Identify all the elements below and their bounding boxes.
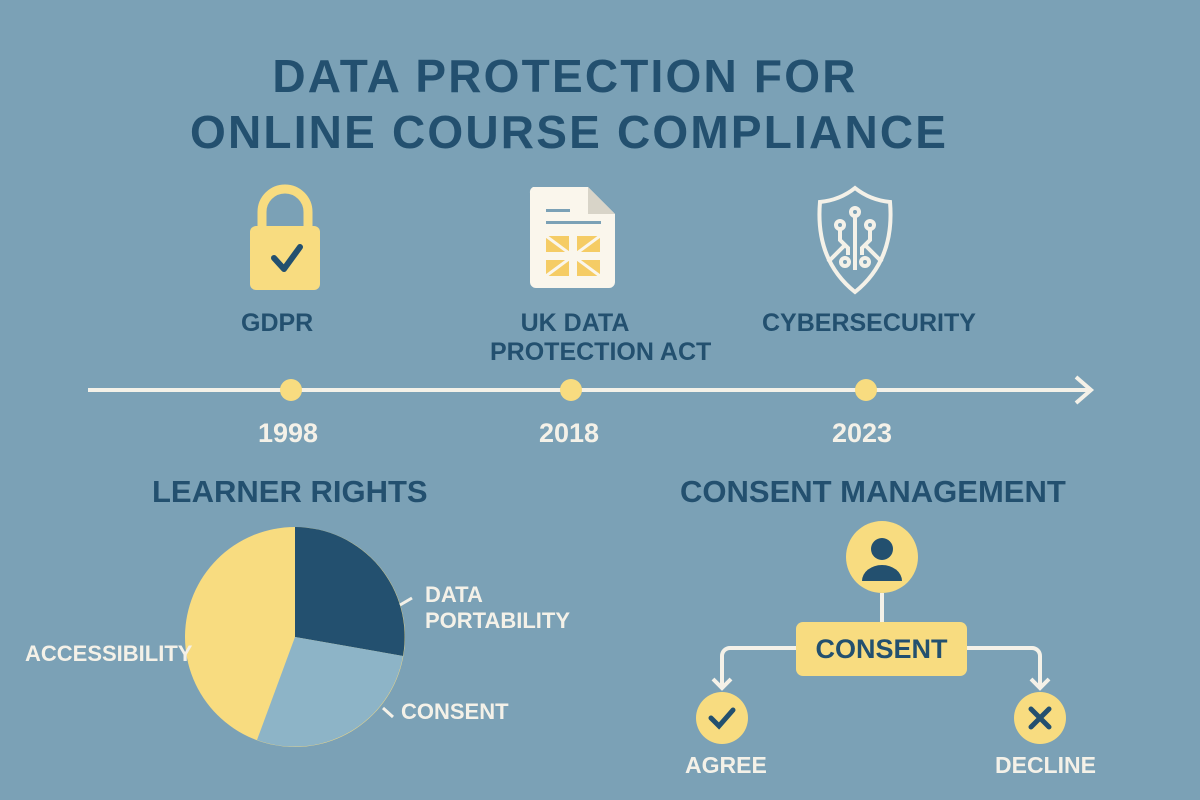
title: ONLINE COURSE COMPLIANCE (190, 106, 948, 158)
title (190, 50, 948, 158)
consent flow (696, 521, 1066, 744)
label: UK Data Protection Act (490, 309, 711, 366)
text: DATA (425, 582, 483, 607)
text: DECLINE (995, 752, 1096, 778)
label: UK Data Protection Act: UK DATA (521, 309, 629, 337)
years: 2023 (832, 418, 892, 448)
label: Cybersecurity: CYBERSECURITY (762, 309, 976, 337)
timeline arrow (88, 377, 1091, 403)
label: GDPR: GDPR (241, 309, 313, 337)
text: ACCESSIBILITY (25, 641, 192, 666)
heading: learner rights: LEARNER RIGHTS (152, 474, 428, 509)
outcome labels (685, 752, 1096, 778)
text: PORTABILITY (425, 608, 570, 633)
years: 1998 (258, 418, 318, 448)
icon: circuit shield (819, 188, 891, 292)
years: 2018 (539, 418, 599, 448)
heading: consent management: CONSENT MANAGEMENT (680, 474, 1066, 509)
icon: document with UK flag (530, 187, 615, 288)
text: AGREE (685, 752, 767, 778)
label: UK Data Protection Act: PROTECTION ACT (490, 338, 711, 366)
pie chart (185, 527, 412, 747)
title: DATA PROTECTION FOR (272, 50, 858, 102)
icon: padlock (250, 189, 320, 290)
pie labels (25, 582, 570, 724)
years (258, 418, 892, 448)
text: CONSENT (401, 699, 509, 724)
consent box text: CONSENT (815, 634, 948, 664)
